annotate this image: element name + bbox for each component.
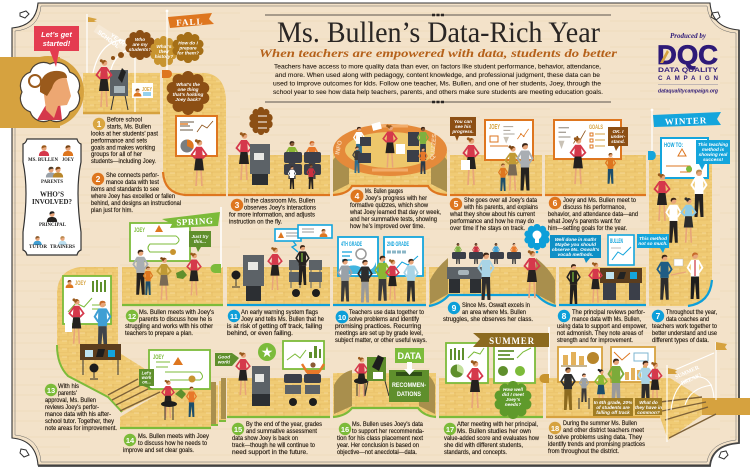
step 7: Throughout the year,: [666, 309, 717, 316]
step 13: parents’: [58, 390, 77, 397]
intro text: school year to see how data help teachers, parents, and others make sure students are meeting education goals.: [273, 89, 603, 96]
summer break arch: BREAK!: [680, 372, 703, 387]
cloud: what's holding Joey back: that’s holding: [173, 92, 203, 97]
step 17: [444, 421, 539, 456]
data into recommendations box: DATA: [398, 351, 422, 361]
thought clouds: What’s: [156, 44, 172, 49]
quiz ring illustration: QUIZZES: [430, 134, 438, 160]
subtitle: When teachers are empowered with data, students do better: [259, 46, 617, 60]
board: Joey plan: [130, 223, 190, 261]
callout: let's get started: [34, 26, 79, 67]
Ms. Bullen and Joey seated: [161, 380, 196, 420]
cloud: what's holding Joey back: [167, 71, 209, 121]
step 9: an area where Ms. Bullen: [462, 309, 526, 316]
board: Bullen: [608, 235, 634, 265]
cloud: what's holding Joey back: one thing: [177, 87, 199, 92]
step 6: 6: [553, 198, 558, 208]
step 5: She goes over all Joey’s data: [464, 197, 537, 204]
thought clouds: prepare: [178, 46, 197, 50]
step 16: year. Her conclusion is based on: [337, 442, 419, 449]
summer break arch: SUMMER: [674, 365, 701, 381]
callouts: summer questions: they have in: [635, 405, 662, 410]
card: Joey: JOEY: [142, 87, 152, 93]
board: goals: GOALS: [589, 124, 603, 131]
board: Joey plan: JOEY: [134, 227, 146, 234]
step 8: strength and for improvement.: [557, 337, 633, 344]
panel: who's involved: MS. BULLEN: [28, 158, 58, 163]
callout: not so much: This method: [639, 236, 667, 241]
step 17: 17: [446, 425, 454, 434]
step 13: With his: [58, 383, 79, 390]
cloud: how well did I meet: Joey’s: [506, 397, 521, 402]
step 9: struggles, she observes her class.: [443, 316, 533, 323]
panel: who's involved: INVOLVED?: [32, 199, 72, 206]
early warning flags: [275, 225, 332, 252]
thought clouds: their: [159, 49, 170, 54]
classroom step 3 illustration: [236, 107, 321, 189]
cloud: how well did I meet: How well: [503, 387, 524, 392]
step 3: 3: [235, 200, 240, 210]
panel: who's involved: JOEY: [62, 158, 74, 163]
callout: just try this: this...: [194, 239, 206, 244]
step 17: Ms. Bullen studies her own: [457, 428, 531, 435]
step 16: Ms. Bullen uses Joey’s data: [352, 421, 423, 428]
step 1: Before school: [107, 116, 142, 124]
summer banner: [473, 327, 549, 383]
board: Bullen: BULLEN: [610, 239, 623, 245]
step 1: starts, Ms. Bullen: [107, 124, 151, 130]
step 4: 4: [355, 191, 360, 201]
callout: well done in math: Maybe you should: [555, 242, 596, 247]
board: how to: [661, 138, 708, 178]
parents meeting: [133, 250, 201, 300]
board: Joey conference: [149, 350, 210, 389]
step 16: 16: [341, 425, 349, 434]
callout: OK I understand: OK. I: [613, 129, 624, 134]
callouts: summer questions: falling off track: [596, 410, 630, 415]
step 2: 2: [96, 174, 101, 184]
callouts: summer questions: of students are: [596, 405, 630, 410]
boards: grade data: 2ND GRADE: [387, 242, 409, 248]
logo: DQC: [657, 40, 718, 70]
step 7: teachers work together to: [652, 323, 717, 330]
step 5: 5: [454, 199, 459, 209]
step 1: performance and sets: [91, 138, 147, 144]
fall banner: [162, 10, 214, 78]
step 4: Joey’s progress with her: [365, 195, 428, 202]
step 3: In the classroom Ms. Bullen: [244, 198, 315, 204]
callout: this teaching method: showing real: [699, 152, 728, 157]
parents with Ms. Bullen: [461, 137, 532, 191]
step 12: Ms. Bullen meets with Joey’s: [139, 309, 214, 316]
step 5: with his parents, and explains: [463, 204, 538, 211]
step 13: 13: [47, 386, 55, 395]
teachers group: [338, 256, 418, 302]
callout: this teaching method: success!: [703, 157, 723, 162]
thought clouds: [111, 30, 203, 67]
step 9: [443, 302, 533, 323]
step 8: using data to support and empower,: [557, 323, 647, 330]
lectern with Ms. Bullen: [96, 59, 128, 110]
board: goals: [554, 120, 621, 159]
Ms. Bullen summer: [468, 360, 482, 408]
thought clouds: How do I: [178, 40, 198, 46]
classroom step 11 illustration: [232, 245, 322, 301]
step 14: 14: [126, 436, 135, 445]
school year arch: YEAR: [109, 33, 126, 48]
step 4: [349, 188, 441, 230]
step 7: different types of data.: [652, 337, 709, 344]
idea cloud: [524, 224, 550, 253]
callout: you can see his progress: progress.: [451, 129, 474, 134]
callouts: summer questions: [593, 398, 662, 416]
step 13: reviews Joey’s perfor-: [45, 404, 99, 411]
step 4: how he’s improved over time.: [350, 223, 425, 230]
step 12: 12: [128, 312, 136, 321]
step 10: subject matter, or other useful ways.: [335, 337, 427, 344]
step 6: [547, 197, 638, 232]
step 1: [91, 116, 158, 165]
panel: who's involved: TUTOR: [29, 245, 47, 250]
callouts: summer questions: common?: [637, 410, 660, 415]
quiz ring illustration: [333, 122, 447, 176]
Ms. Bullen with laptop: [354, 355, 389, 397]
step 2: plan just for him.: [91, 207, 133, 214]
step 7: better understand and use: [652, 330, 717, 337]
step 18: and other district teachers meet: [563, 427, 644, 434]
title: Ms. Bullen’s Data-Rich Year: [277, 16, 600, 49]
callout: well done in math: Well done in math!: [555, 237, 597, 242]
step 12: parents to discuss how he is: [139, 316, 212, 323]
callout: good work: work!: [218, 360, 231, 364]
step 4: formative quizzes, which show: [350, 202, 428, 209]
step 1: looks at her students’ past: [91, 130, 158, 138]
callout: let's get started: Let’s get: [41, 30, 72, 39]
callout: let's work on: work: [142, 375, 152, 380]
step 15: By the end of the year, grades: [246, 421, 322, 428]
callout: let's get started: started!: [43, 39, 71, 48]
step 3: for more information, and adjusts: [229, 212, 315, 218]
step 14: Ms. Bullen meets with Joey: [138, 433, 210, 440]
step 2: mance data with test: [106, 179, 159, 186]
step 10: Teachers use data together to: [349, 309, 424, 316]
step 12: teachers to prepare a plan.: [125, 330, 193, 337]
step 5: [449, 197, 538, 232]
step 10: promising practices. Recurring: [335, 323, 421, 330]
step 18: to solve problems using data. They: [548, 434, 643, 441]
callout: good work: Good: [218, 354, 230, 360]
callout: you can see his progress: see his: [455, 124, 471, 129]
panel: who's involved: WHO’S: [40, 192, 64, 198]
panel: who's involved: PRINCIPAL: [39, 223, 67, 228]
handshake: [657, 253, 702, 300]
step 8: mance data with Ms. Bullen,: [572, 316, 641, 323]
step 16: objective—not anecdotal—data.: [337, 449, 417, 456]
cloud: how well did I meet: needs?: [505, 402, 521, 407]
classroom step 15 illustration: [236, 352, 324, 406]
step 11: An early warning system flags: [241, 309, 318, 316]
callout: well done in math: [550, 235, 601, 263]
step 15: [232, 421, 322, 456]
data into recommendations box: [389, 348, 429, 402]
step 2: [90, 172, 181, 214]
step 4: Ms. Bullen gauges: [365, 188, 403, 195]
cloud: what's holding Joey back: What’s the: [176, 82, 200, 87]
quiz ring illustration: INFO: [335, 140, 344, 155]
Ms. Bullen and Joey: [571, 137, 615, 184]
step 8: 8: [562, 311, 567, 321]
callouts: summer questions: What do: [639, 400, 658, 405]
boards: summer data: [446, 343, 535, 383]
desk: [80, 344, 121, 379]
callout: let's work on: [139, 369, 154, 390]
data into recommendations box: RECOMMEN-: [392, 383, 426, 389]
step 3: observes Joey’s interactions: [244, 204, 316, 212]
step 2: behind, and designs an instructional: [91, 200, 181, 207]
step 13: mance data with his after-: [45, 411, 111, 418]
step 14: improve and set clear goals.: [123, 447, 194, 454]
step 3: [229, 198, 316, 226]
step 1: groups for all of her: [91, 151, 143, 158]
intro text: and more. When used along with pedagogy, content knowledge, and professional judgment, these data can be: [275, 72, 600, 79]
callout: OK I understand: under-: [611, 134, 626, 139]
step 8: The principal reviews perfor-: [572, 309, 645, 316]
school year arch: [87, 14, 135, 112]
step 10: meetings are set up by grade level,: [335, 330, 423, 337]
district teachers: [561, 359, 662, 410]
step 1: goals and makes working: [91, 144, 155, 152]
step 13: [45, 383, 117, 432]
cloud: what's holding Joey back: Joey back?: [175, 97, 201, 102]
callout: just try this: [189, 231, 211, 252]
step 11: [227, 309, 324, 337]
step 18: [548, 420, 645, 455]
step 5: performance and how he may do: [450, 218, 534, 225]
step 18: identify trends and promising practices: [548, 441, 645, 448]
step 5: what they show about his current: [449, 211, 535, 218]
step 17: value-added score and evaluates how: [444, 435, 539, 442]
callout: OK I understand: [608, 127, 628, 151]
step 6: discuss his performance,: [563, 204, 626, 211]
callout: OK I understand: stand.: [611, 139, 625, 144]
boards: grade data: 4TH GRADE: [341, 242, 362, 248]
star badge: [258, 343, 276, 361]
boards: district data: [558, 347, 655, 382]
step 15: need support in the future.: [232, 449, 308, 456]
callout: this teaching method: [696, 140, 730, 170]
cloud: how well did I meet: did I meet: [502, 392, 524, 397]
winter banner: [648, 109, 721, 160]
board: Joey data: JOEY: [489, 124, 500, 131]
step 8: [557, 309, 647, 344]
step 16: tion for his class placement next: [337, 435, 423, 442]
step 17: standards, and concepts.: [444, 449, 507, 456]
title rules: [265, 15, 611, 102]
callout: not so much: not so much.: [638, 241, 668, 246]
step 15: and summative assessment: [246, 428, 317, 435]
callout: well done in math: vocab methods.: [558, 252, 593, 257]
step 11: 11: [230, 312, 238, 321]
spring banner: SPRING: [176, 216, 214, 227]
fall banner: FALL: [176, 16, 204, 28]
callout: let's work on: on...: [142, 380, 151, 384]
logo: dataqualitycampaign.org: [658, 88, 718, 94]
step 7: 7: [656, 311, 661, 321]
callout: just try this: Just try: [192, 234, 209, 239]
step 15: 15: [234, 425, 242, 434]
step 18: 18: [551, 424, 559, 433]
step 9: 9: [452, 303, 457, 313]
step 17: she did with different students,: [444, 442, 523, 449]
step 10: 10: [338, 313, 346, 322]
step 3: instruction on the fly.: [229, 218, 282, 226]
step 12: struggling and works with his other: [125, 323, 214, 330]
step 11: behind, or even failing.: [227, 330, 293, 337]
callouts: summer questions: In 6th grade, 20%: [594, 400, 633, 405]
step 18: During the summer Ms. Bullen: [563, 420, 637, 427]
logo: CAMPAIGN: [658, 75, 719, 82]
intro text: Teachers have access to more quality data than ever, on factors like student performance, behavior, attendance,: [274, 64, 601, 70]
board: fall data: [176, 116, 217, 156]
step 6: him—setting goals for the year.: [548, 225, 627, 232]
callout: good work: [215, 353, 239, 366]
spring banner: [162, 207, 221, 273]
step 1: students—including Joey.: [91, 158, 156, 165]
step 13: school tutor. Together, they: [45, 418, 115, 425]
board: tutor review: [63, 276, 111, 324]
step 10: [335, 309, 427, 344]
callout: this teaching method: This teaching: [698, 142, 728, 147]
step 14: [123, 433, 210, 454]
callout: this teaching method: method is: [702, 147, 724, 152]
panel: who's involved: TRAINERS: [50, 245, 75, 250]
tutor and Ms. Bullen: [65, 298, 110, 350]
gold end band: [690, 398, 750, 415]
thought clouds: students?: [129, 47, 151, 52]
floors: [57, 73, 712, 440]
step 13: approval, Ms. Bullen: [45, 397, 96, 404]
thought clouds: are my: [132, 42, 148, 47]
step 2: items and standards to see: [91, 186, 159, 193]
step 14: to discuss how he needs to: [138, 440, 207, 447]
thought clouds: history?: [155, 54, 173, 59]
thought clouds: Who: [135, 37, 145, 42]
board: progress: [283, 341, 324, 369]
gold start band: [0, 57, 60, 128]
principal meeting: [567, 262, 642, 304]
intro text: used to improve outcomes for kids. Follow one teacher, Ms. Bullen, and one of her students, Joey, through the: [273, 80, 601, 88]
intro text: [273, 64, 603, 96]
students observed: [447, 243, 540, 300]
star badge: ★: [261, 344, 273, 360]
step 1: 1: [97, 119, 102, 129]
winter people: [654, 170, 706, 243]
step 15: data show Joey is back on: [232, 435, 298, 442]
callout: you can see his progress: You can: [454, 119, 472, 124]
step 2: where Joey has excelled or fallen: [90, 193, 175, 200]
step 5: over time if he stays on track.: [450, 225, 525, 232]
panel: who's involved: PARENTS: [41, 180, 63, 185]
step 4: and her summative tests, showing: [350, 216, 437, 223]
boards: grade data: [338, 237, 423, 276]
callout: let's work on: Let’s: [142, 370, 152, 376]
summer break arch: [667, 342, 727, 442]
step 10: solve problems and identify: [349, 316, 420, 323]
step 16: [337, 421, 424, 456]
card: Joey: [132, 83, 153, 98]
panel: who's involved: [23, 139, 81, 255]
step 4: what Joey learned that day or week,: [349, 209, 441, 216]
step 11: is at risk of getting off track, failing: [227, 323, 322, 330]
step 17: After meeting with her principal,: [457, 421, 538, 428]
thought clouds: for them?: [177, 50, 199, 56]
step 12: [125, 309, 214, 337]
board: tutor review: JOEY: [75, 280, 87, 287]
cloud: how well did I meet: [495, 381, 531, 419]
logo: DATA QUALITY: [658, 67, 719, 74]
callout: you can see his progress: [450, 117, 476, 141]
logo: [657, 32, 719, 94]
stairs: [108, 379, 716, 438]
step 16: to support her recommenda-: [352, 428, 424, 435]
summer banner: SUMMER: [489, 336, 535, 346]
logo: Produced by: [670, 32, 707, 40]
step 8: not admonish. They note areas of: [557, 330, 643, 337]
step 6: Joey and Ms. Bullen meet to: [563, 197, 636, 204]
data into recommendations box: DATIONS: [397, 392, 421, 398]
step 6: what Joey’s parents want for: [547, 218, 622, 225]
step 7: [652, 309, 717, 344]
winter banner: WINTER: [665, 115, 707, 127]
board: how to: HOW TO:: [664, 143, 683, 149]
step 11: Joey and tells Ms. Bullen that he: [241, 316, 324, 323]
step 7: data coaches and: [666, 316, 709, 323]
step 13: note areas for improvement.: [45, 425, 117, 432]
step 6: behavior, and attendance data—and: [548, 211, 638, 218]
step 9: Since Ms. Oswalt excels in: [462, 302, 530, 309]
step 2: She connects perfor-: [106, 172, 159, 179]
step 18: from throughout the district.: [548, 448, 619, 455]
board: Joey data: [485, 120, 533, 160]
board: Joey conference: JOEY: [153, 354, 165, 361]
callout: not so much: [637, 234, 669, 253]
Ms. Bullen at board: [192, 139, 206, 186]
portrait: [12, 56, 84, 128]
callout: well done in math: observe Ms. Oswalt’s: [552, 247, 600, 252]
school year arch: SCHOOL: [96, 30, 120, 50]
step 15: track—though he will continue to: [232, 442, 315, 449]
